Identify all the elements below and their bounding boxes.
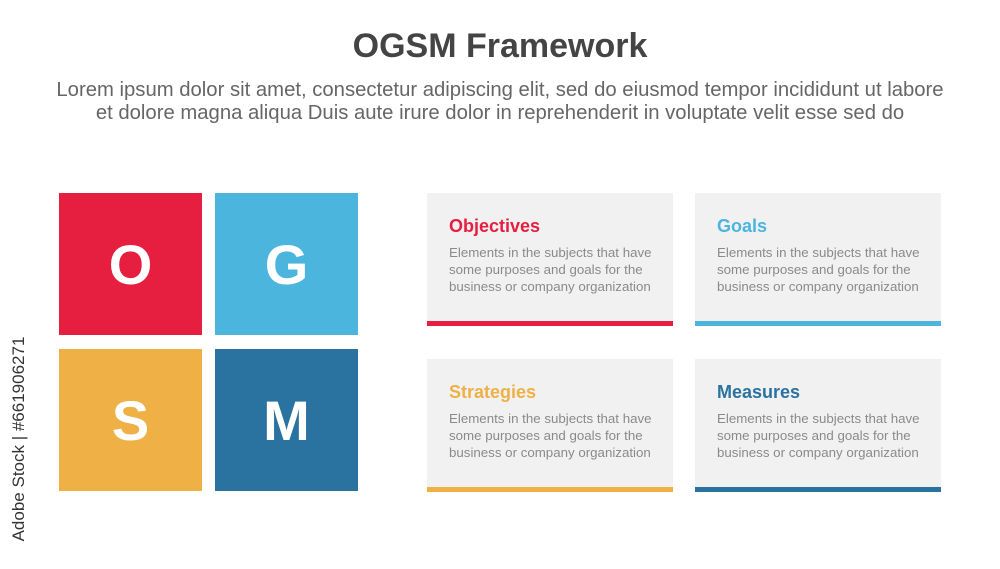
watermark side text: Adobe Stock | #661906271 — [9, 337, 28, 541]
square M: M — [263, 388, 310, 452]
subtitle: et dolore magna aliqua Duis aute irure dolor in reprehenderit in voluptate velit esse sed do — [96, 102, 904, 124]
card: objectives — [427, 193, 673, 326]
card: objectives: Objectives — [449, 216, 540, 236]
card: measures: Measures — [717, 382, 800, 402]
card: measures: Elements in the subjects that have some purposes and goals for the business or company organization — [717, 411, 920, 460]
square G: G — [265, 232, 308, 296]
square G — [215, 193, 358, 335]
card: strategies — [427, 359, 673, 492]
card: measures — [695, 359, 941, 492]
title: OGSM Framework — [353, 27, 647, 65]
square O — [59, 193, 202, 335]
subtitle — [56, 79, 944, 124]
OGSM grid — [59, 193, 358, 491]
square M — [215, 349, 358, 491]
card: goals: Elements in the subjects that have some purposes and goals for the business or company organization — [717, 245, 920, 294]
card: objectives: Elements in the subjects that have some purposes and goals for the business or company organization — [449, 245, 652, 294]
card: goals — [695, 193, 941, 326]
card: goals: Goals — [717, 216, 767, 236]
square O: O — [109, 232, 152, 296]
card: strategies: Strategies — [449, 382, 536, 402]
square S — [59, 349, 202, 491]
subtitle: Lorem ipsum dolor sit amet, consectetur adipiscing elit, sed do eiusmod tempor incididunt ut labore — [56, 79, 944, 101]
card: strategies: Elements in the subjects that have some purposes and goals for the business or company organization — [449, 411, 652, 460]
square S: S — [112, 388, 149, 452]
